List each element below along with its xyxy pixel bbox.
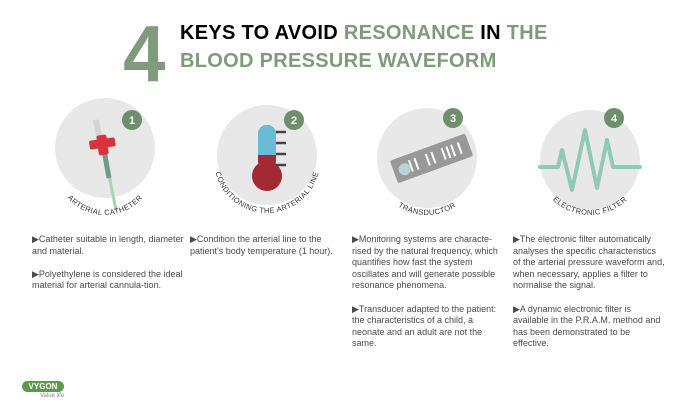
title: BLOOD PRESSURE WAVEFORM [180,50,497,72]
panel icon: transducer: 3 [450,113,456,125]
text: transducer: ▶Monitoring systems are characte-rised by the natural frequency, which quantifies how fast the system oscillates and will generate possible resonance phenomena. [352,234,498,290]
panel icon: thermometer [216,105,318,213]
logo: VYGON [29,382,57,391]
text: filter [513,234,665,348]
panel icon: transducer [377,108,477,215]
text: catheter [32,234,184,290]
text: conditioning: ▶Condition the arterial line to the patient's body temperature (1 hour). [190,234,333,256]
panel icon: arterial catheter [55,98,155,215]
text: filter: ▶A dynamic electronic filter is available in the P.R.A.M. method and has been demonstrated to be effective. [513,304,660,348]
panel icon: electronic filter [538,108,642,215]
panel icon: thermometer: 2 [291,115,297,127]
text: transducer: ▶Transducer adapted to the patient: the characteristics of a child, a neonate and an adult are not the same. [352,304,496,348]
panel icon: thermometer: CONDITIONING THE ARTERIAL LINE [216,172,318,213]
text: catheter: ▶Polyethylene is considered the ideal material for arterial cannula-tion. [32,269,183,290]
panel icon: electronic filter: 4 [611,113,618,125]
logo [22,381,64,399]
icons row [55,98,642,215]
title [180,22,548,72]
panel icon: arterial catheter: 1 [129,115,135,127]
panel icon: electronic filter: ELECTRONIC FILTER [553,196,627,215]
text: filter: ▶The electronic filter automatically analyses the specific characteristics of the arterial pressure waveform and, when necessary, applies a filter to normalise the signal. [513,234,665,290]
panel icon: arterial catheter: ARTERIAL CATHETER [67,196,142,215]
text: catheter: ▶Catheter suitable in length, diameter and material. [32,234,184,256]
logo: Value life [40,393,64,399]
panel icon: transducer: TRANSDUCTOR [400,202,456,215]
text: transducer [352,234,498,348]
title number: 4 [123,9,165,98]
title: KEYS TO AVOID RESONANCE IN THE [180,22,548,44]
